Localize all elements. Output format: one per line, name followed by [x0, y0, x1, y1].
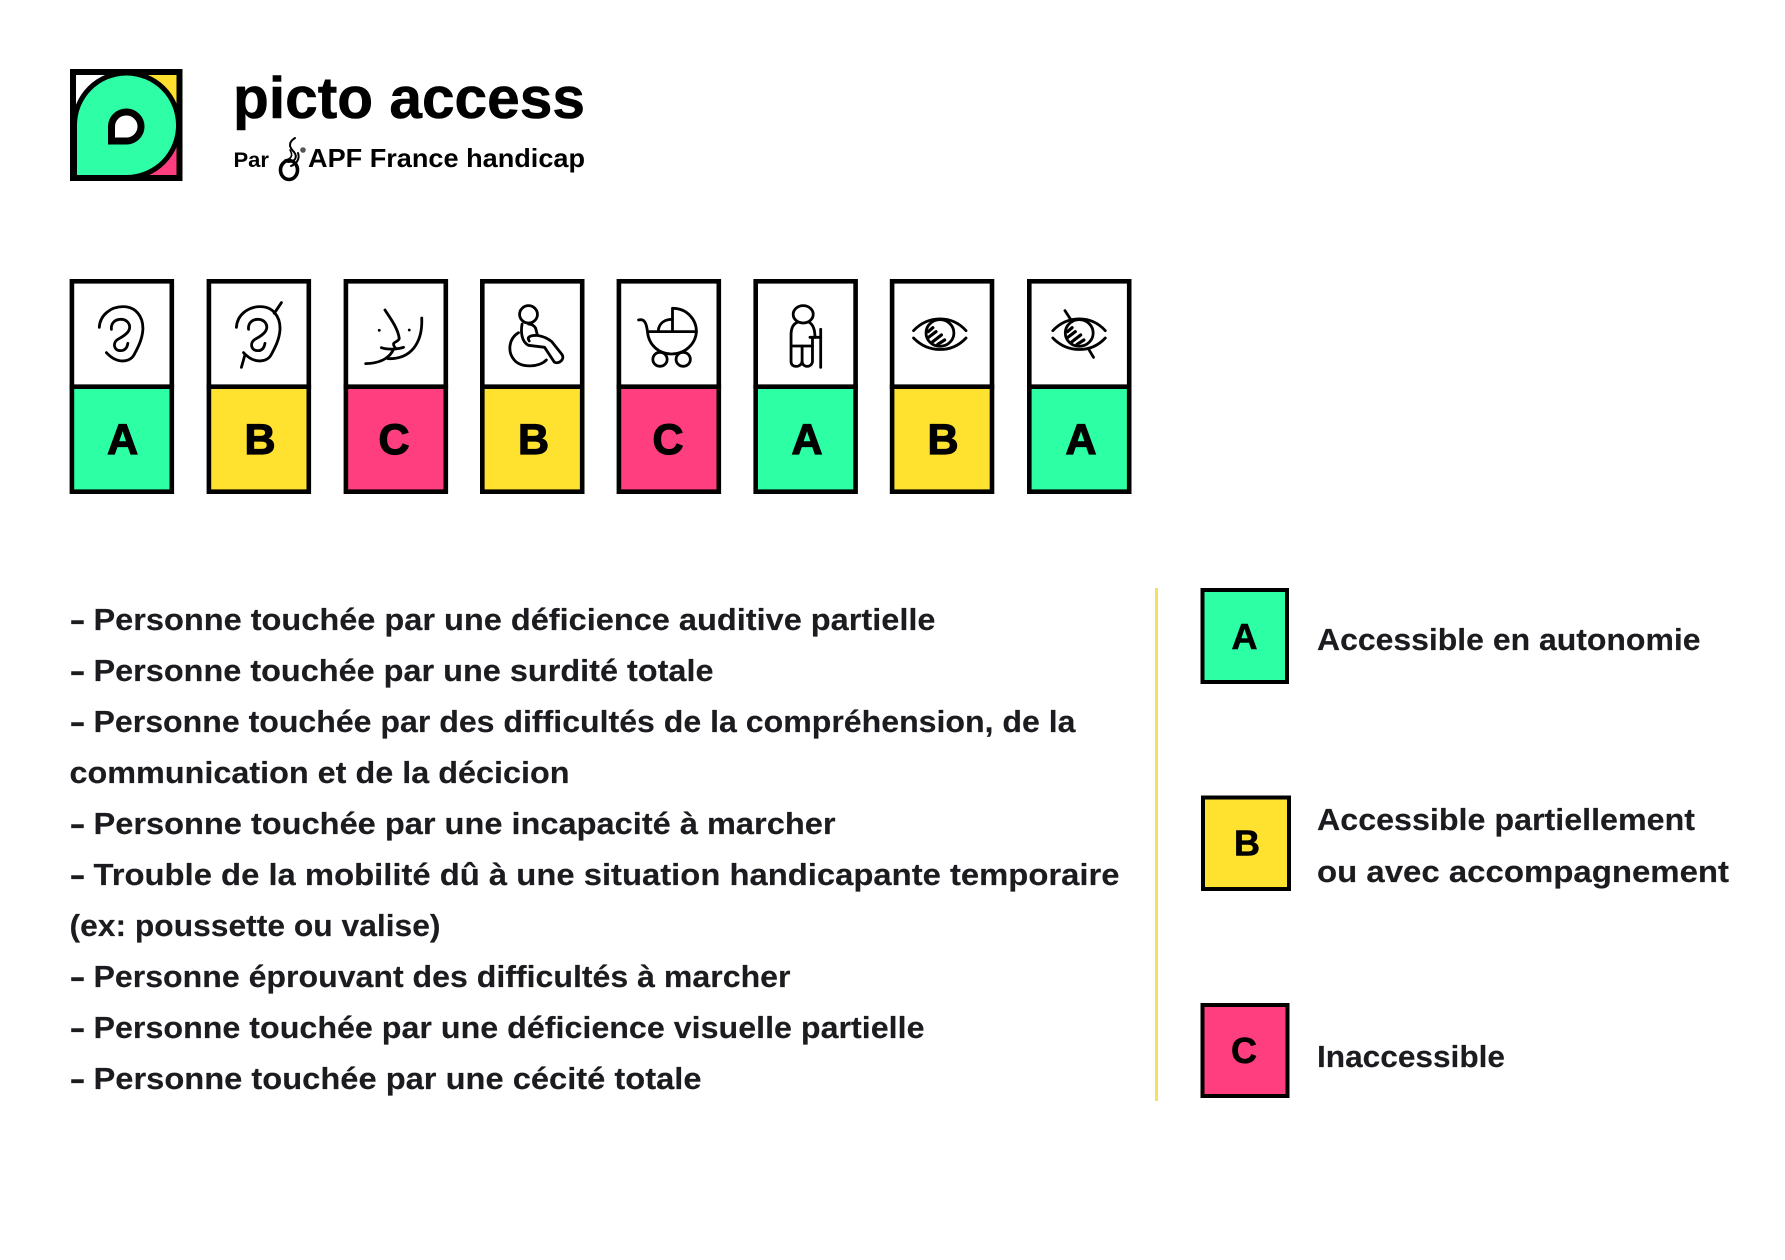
text block: profile descriptions: (ex: poussette ou valise)	[70, 908, 440, 943]
legend item: B: ou avec accompagnement	[1317, 854, 1729, 889]
text block: profile descriptions: -	[70, 857, 86, 892]
icon: ear	[99, 307, 143, 361]
text block: profile descriptions: Personne touchée par une incapacité à marcher	[94, 806, 836, 841]
card: partial visual impairment, rating B	[890, 281, 994, 492]
title: picto access	[233, 66, 585, 131]
text block: profile descriptions: -	[70, 704, 86, 739]
card: blindness, rating A	[1027, 281, 1132, 492]
text block: profile descriptions: -	[70, 959, 86, 994]
legend item: A: A	[1232, 616, 1258, 657]
card: stroller, rating C	[617, 281, 721, 492]
text block: profile descriptions: -	[70, 602, 86, 637]
text block: profile descriptions: -	[70, 806, 86, 841]
card: wheelchair, rating B	[480, 281, 584, 492]
text block: profile descriptions: communication et de la décicion	[70, 755, 570, 790]
card: elderly walker, rating A: A	[791, 416, 823, 464]
text block: profile descriptions: -	[70, 1061, 86, 1096]
text block: profile descriptions: Personne touchée par une cécité totale	[94, 1061, 702, 1096]
card: comprehension difficulty, rating C	[344, 281, 448, 492]
icon: APF wheelchair logo	[280, 138, 306, 180]
card: stroller, rating C: C	[652, 416, 684, 464]
text block: profile descriptions: Personne touchée par une surdité totale	[94, 653, 714, 688]
text block: profile descriptions: -	[70, 1010, 86, 1045]
text block: profile descriptions: Trouble de la mobilité dû à une situation handicapante temporaire	[94, 857, 1120, 892]
card: wheelchair, rating B: B	[518, 416, 549, 464]
subtitle: par APF France handicap	[234, 138, 585, 180]
legend item: A	[1202, 590, 1700, 682]
icon: wheelchair user	[510, 306, 563, 366]
icon: eye	[914, 319, 966, 349]
legend item: C	[1202, 1005, 1505, 1096]
panel: pictogram cards	[70, 281, 1132, 492]
text block: profile descriptions	[70, 602, 1120, 1096]
icon: elderly person with cane	[791, 306, 821, 367]
card: elderly walker, rating A	[753, 281, 858, 492]
text block: profile descriptions: -	[70, 653, 86, 688]
subtitle: par APF France handicap: Par	[234, 149, 269, 172]
icon: face profile	[366, 310, 422, 364]
legend item: C: C	[1231, 1030, 1257, 1071]
text block: profile descriptions: Personne éprouvant des difficultés à marcher	[94, 959, 790, 994]
card: total deafness, rating B: B	[244, 416, 276, 464]
legend item: B: B	[1234, 822, 1260, 864]
subtitle: par APF France handicap: APF France handicap	[308, 143, 585, 173]
legend item: B	[1203, 798, 1729, 889]
text block: profile descriptions: Personne touchée par des difficultés de la compréhension, de la	[94, 704, 1076, 739]
card: partial hearing loss, rating A	[70, 281, 174, 492]
card: blindness, rating A: A	[1065, 416, 1097, 464]
card: partial hearing loss, rating A: A	[107, 416, 138, 464]
card: partial visual impairment, rating B: B	[927, 416, 959, 464]
logo: picto access	[70, 69, 182, 181]
text block: profile descriptions: Personne touchée par une déficience auditive partielle	[94, 602, 936, 637]
legend item: A: Accessible en autonomie	[1317, 622, 1700, 657]
card: comprehension difficulty, rating C: C	[378, 416, 410, 464]
icon: crossed eye	[1053, 311, 1105, 357]
legend	[1202, 590, 1729, 1096]
legend item: B: Accessible partiellement	[1317, 802, 1695, 837]
icon: crossed ear	[236, 303, 281, 367]
icon: baby stroller	[639, 308, 696, 366]
card: total deafness, rating B	[207, 281, 311, 492]
text block: profile descriptions: Personne touchée par une déficience visuelle partielle	[94, 1010, 925, 1045]
legend item: C: Inaccessible	[1317, 1039, 1505, 1074]
